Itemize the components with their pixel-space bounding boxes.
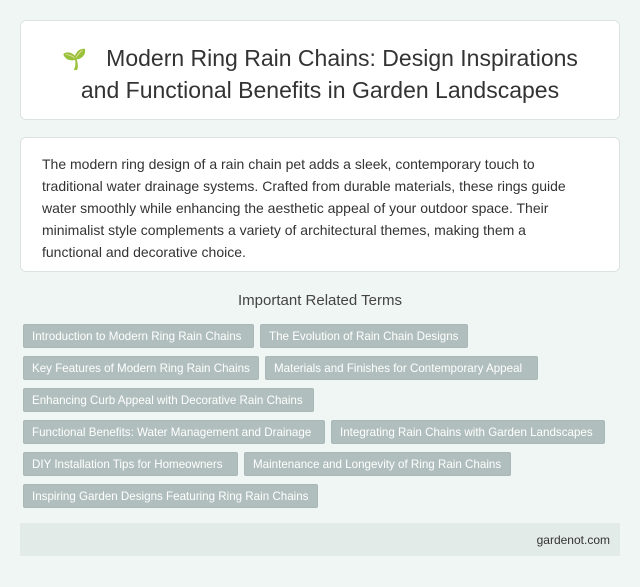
tags: Inspiring Garden Designs Featuring Ring Rain Chains xyxy=(32,490,308,503)
description text: The modern ring design of a rain chain pet adds a sleek, contemporary touch to xyxy=(42,156,535,172)
tags: Maintenance and Longevity of Ring Rain Chains xyxy=(253,458,501,471)
description text: water smoothly while enhancing the aesthetic appeal of your outdoor space. Their xyxy=(42,200,548,216)
tags: Key Features of Modern Ring Rain Chains xyxy=(32,362,250,375)
title xyxy=(62,45,578,103)
tags: Introduction to Modern Ring Rain Chains xyxy=(32,330,241,343)
description text: functional and decorative choice. xyxy=(42,244,246,260)
tags: Functional Benefits: Water Management and Drainage xyxy=(32,426,311,439)
tags: DIY Installation Tips for Homeowners xyxy=(32,458,223,471)
description text: traditional water drainage systems. Crafted from durable materials, these rings guide xyxy=(42,178,566,194)
footer xyxy=(20,523,620,556)
title card xyxy=(20,20,620,120)
description card xyxy=(20,137,620,272)
heading: related terms: Important Related Terms xyxy=(238,292,402,309)
tags: Enhancing Curb Appeal with Decorative Rain Chains xyxy=(32,394,303,407)
tags: Materials and Finishes for Contemporary Appeal xyxy=(274,362,522,375)
description text: minimalist style complements a variety of architectural themes, making them a xyxy=(42,222,526,238)
title: 🌱 Modern Ring Rain Chains: Design Inspirations xyxy=(62,45,578,71)
tags: The Evolution of Rain Chain Designs xyxy=(269,330,458,343)
tags: Integrating Rain Chains with Garden Landscapes xyxy=(340,426,593,439)
footer credit: gardenot.com xyxy=(537,533,610,547)
title: and Functional Benefits in Garden Landscapes xyxy=(81,77,559,103)
description text xyxy=(42,156,566,260)
